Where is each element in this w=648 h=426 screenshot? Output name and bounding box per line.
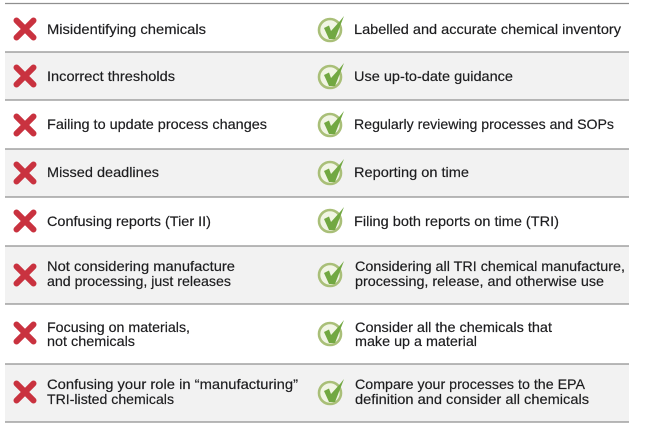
row 4 mistake [16,164,159,182]
row 5 solution [319,207,559,232]
row 3 mistake: Failing to update process changes [47,116,267,132]
row 7 mistake: Focusing on materials, [47,319,190,335]
row 4 mistake: Missed deadlines [47,164,159,180]
row 5 mistake: Confusing reports (Tier II) [47,213,211,229]
row 6 solution: processing, release, and otherwise use [355,273,604,289]
row 2 solution: Use up-to-date guidance [354,68,513,84]
row 8 solution: Compare your processes to the EPA [355,376,586,392]
row 6 solution: Considering all TRI chemical manufacture, [355,258,625,274]
row 7 solution: make up a material [355,333,477,349]
row 1 solution: Labelled and accurate chemical inventory [354,21,621,37]
row 8 mistake: Confusing your role in “manufacturing” [47,376,298,392]
row 7 solution: Consider all the chemicals that [355,319,552,335]
row 8 mistake: TRI-listed chemicals [47,391,174,407]
row 6 solution [319,258,625,289]
row 8 solution [319,376,589,407]
row 3 solution: Regularly reviewing processes and SOPs [354,116,614,132]
row 1 solution [319,16,621,41]
row 4 solution [319,159,469,184]
row 8 solution: definition and consider all chemicals [355,391,589,407]
row 8 mistake [16,376,298,407]
row 1 mistake: Misidentifying chemicals [47,21,206,37]
row 7 solution [319,319,552,349]
row 4 solution: Reporting on time [354,164,469,180]
row 7 mistake: not chemicals [47,333,135,349]
row 6 mistake: Not considering manufacture [47,258,235,274]
row 3 solution [319,111,614,136]
row 2 solution [319,63,513,88]
row 5 solution: Filing both reports on time (TRI) [354,213,559,229]
row 6 mistake [16,258,235,289]
row 2 mistake: Incorrect thresholds [47,68,175,84]
row 6 mistake: and processing, just releases [47,273,231,289]
row 7 mistake [16,319,190,349]
